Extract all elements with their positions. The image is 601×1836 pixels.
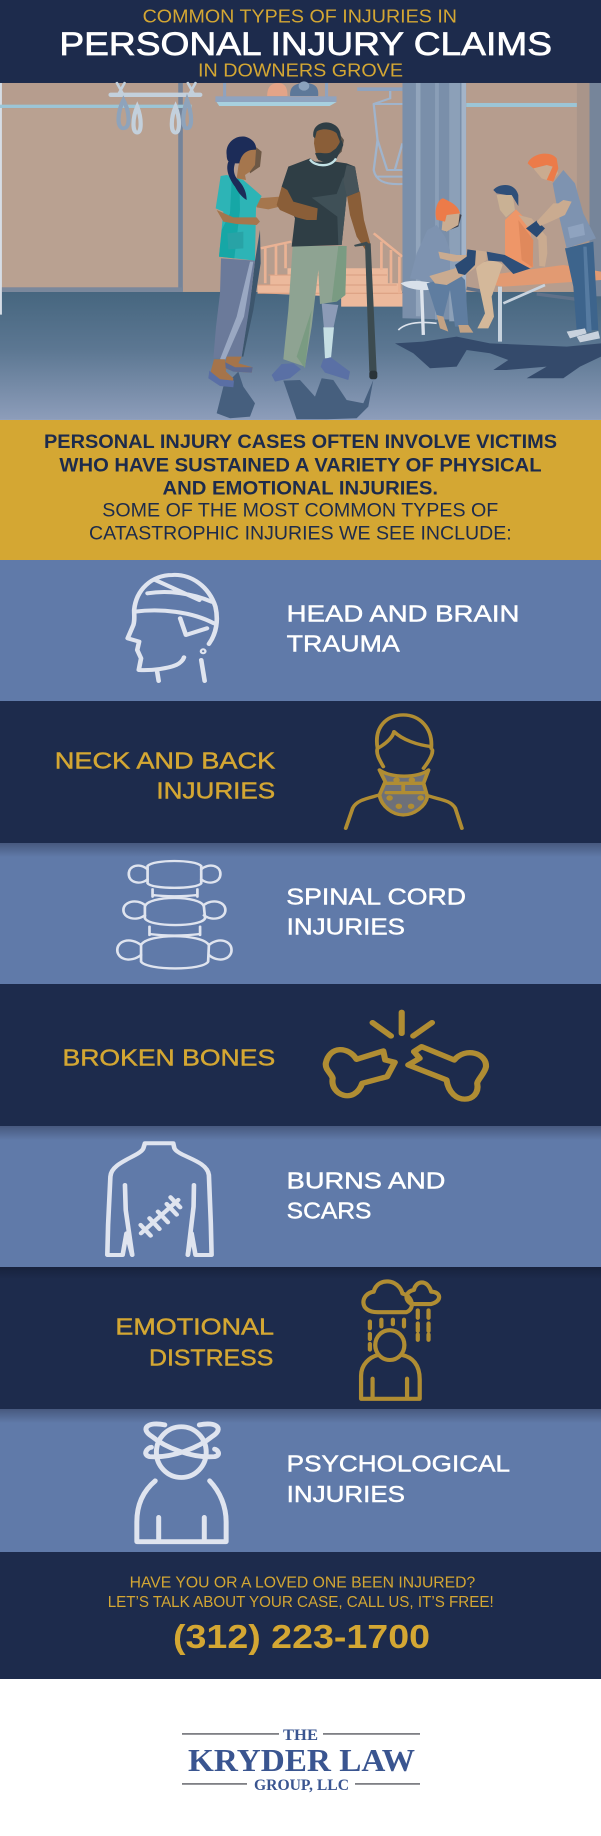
call to action: LET’S TALK ABOUT YOUR CASE, CALL US, IT’S FREE! <box>108 1594 494 1611</box>
logo: The Kryder Law Group: GROUP, LLC <box>254 1777 349 1794</box>
therapy group at table <box>395 154 601 378</box>
shelf with balls <box>215 81 337 106</box>
title banner: COMMON TYPES OF INJURIES IN <box>143 6 457 27</box>
panel: neck and back injuries: INJURIES <box>156 777 275 803</box>
panel: emotional distress: EMOTIONAL <box>115 1314 274 1340</box>
panel: burns and scars <box>0 1126 601 1267</box>
title banner: PERSONAL INJURY CLAIMS <box>59 26 552 62</box>
icon: person under rain clouds <box>361 1281 439 1399</box>
illustration: physical therapy room <box>0 81 601 420</box>
logo: The Kryder Law Group: THE <box>283 1727 318 1744</box>
panel: head and brain trauma: TRAUMA <box>287 631 400 657</box>
panel: emotional distress: DISTRESS <box>149 1344 273 1370</box>
orange stairs <box>258 233 402 307</box>
title banner <box>0 0 601 83</box>
icon: broken bone <box>326 1012 486 1099</box>
panel: burns and scars: BURNS AND <box>287 1167 445 1193</box>
panel: burns and scars: SCARS <box>287 1197 371 1223</box>
call to action: HAVE YOU OR A LOVED ONE BEEN INJURED? <box>130 1575 476 1592</box>
panel: psychological injuries: PSYCHOLOGICAL <box>287 1450 510 1476</box>
patient lift sling <box>357 87 402 184</box>
logo: The Kryder Law Group <box>182 1727 420 1794</box>
curtain <box>402 83 466 321</box>
panel: neck and back injuries: NECK AND BACK <box>55 747 276 773</box>
intro band: CATASTROPHIC INJURIES WE SEE INCLUDE: <box>89 522 512 544</box>
icon: scarred torso <box>107 1143 212 1255</box>
title banner: IN DOWNERS GROVE <box>198 60 403 81</box>
intro band: SOME OF THE MOST COMMON TYPES OF <box>102 499 498 521</box>
nurse and patient with prosthetic leg <box>208 122 377 419</box>
panel: head and brain trauma: HEAD AND BRAIN <box>287 600 519 626</box>
panel: broken bones <box>0 984 601 1126</box>
panel: psychological injuries: INJURIES <box>287 1481 405 1507</box>
intro band <box>0 420 601 560</box>
panel: broken bones: BROKEN BONES <box>62 1045 275 1071</box>
call to action: (312) 223-1700 <box>173 1618 430 1655</box>
icon: spine vertebrae <box>117 861 232 968</box>
panel: spinal cord injuries: SPINAL CORD <box>286 883 466 909</box>
panel: head and brain trauma <box>0 560 601 701</box>
intro band: WHO HAVE SUSTAINED A VARIETY OF PHYSICAL <box>59 455 542 477</box>
logo: The Kryder Law Group: KRYDER LAW <box>188 1742 415 1778</box>
intro band: PERSONAL INJURY CASES OFTEN INVOLVE VICTIMS <box>44 431 557 453</box>
panel: spinal cord injuries <box>0 843 601 984</box>
hanging straps <box>108 83 202 133</box>
intro band: AND EMOTIONAL INJURIES. <box>162 478 438 500</box>
icon: neck brace <box>346 715 462 828</box>
icon: dizzy person <box>137 1424 226 1542</box>
panel: emotional distress <box>0 1267 601 1409</box>
icon: bandaged head <box>128 575 217 681</box>
panel: spinal cord injuries: INJURIES <box>287 914 405 940</box>
panel: psychological injuries <box>0 1409 601 1552</box>
panel: neck and back injuries <box>0 701 601 843</box>
call to action <box>0 1552 601 1679</box>
